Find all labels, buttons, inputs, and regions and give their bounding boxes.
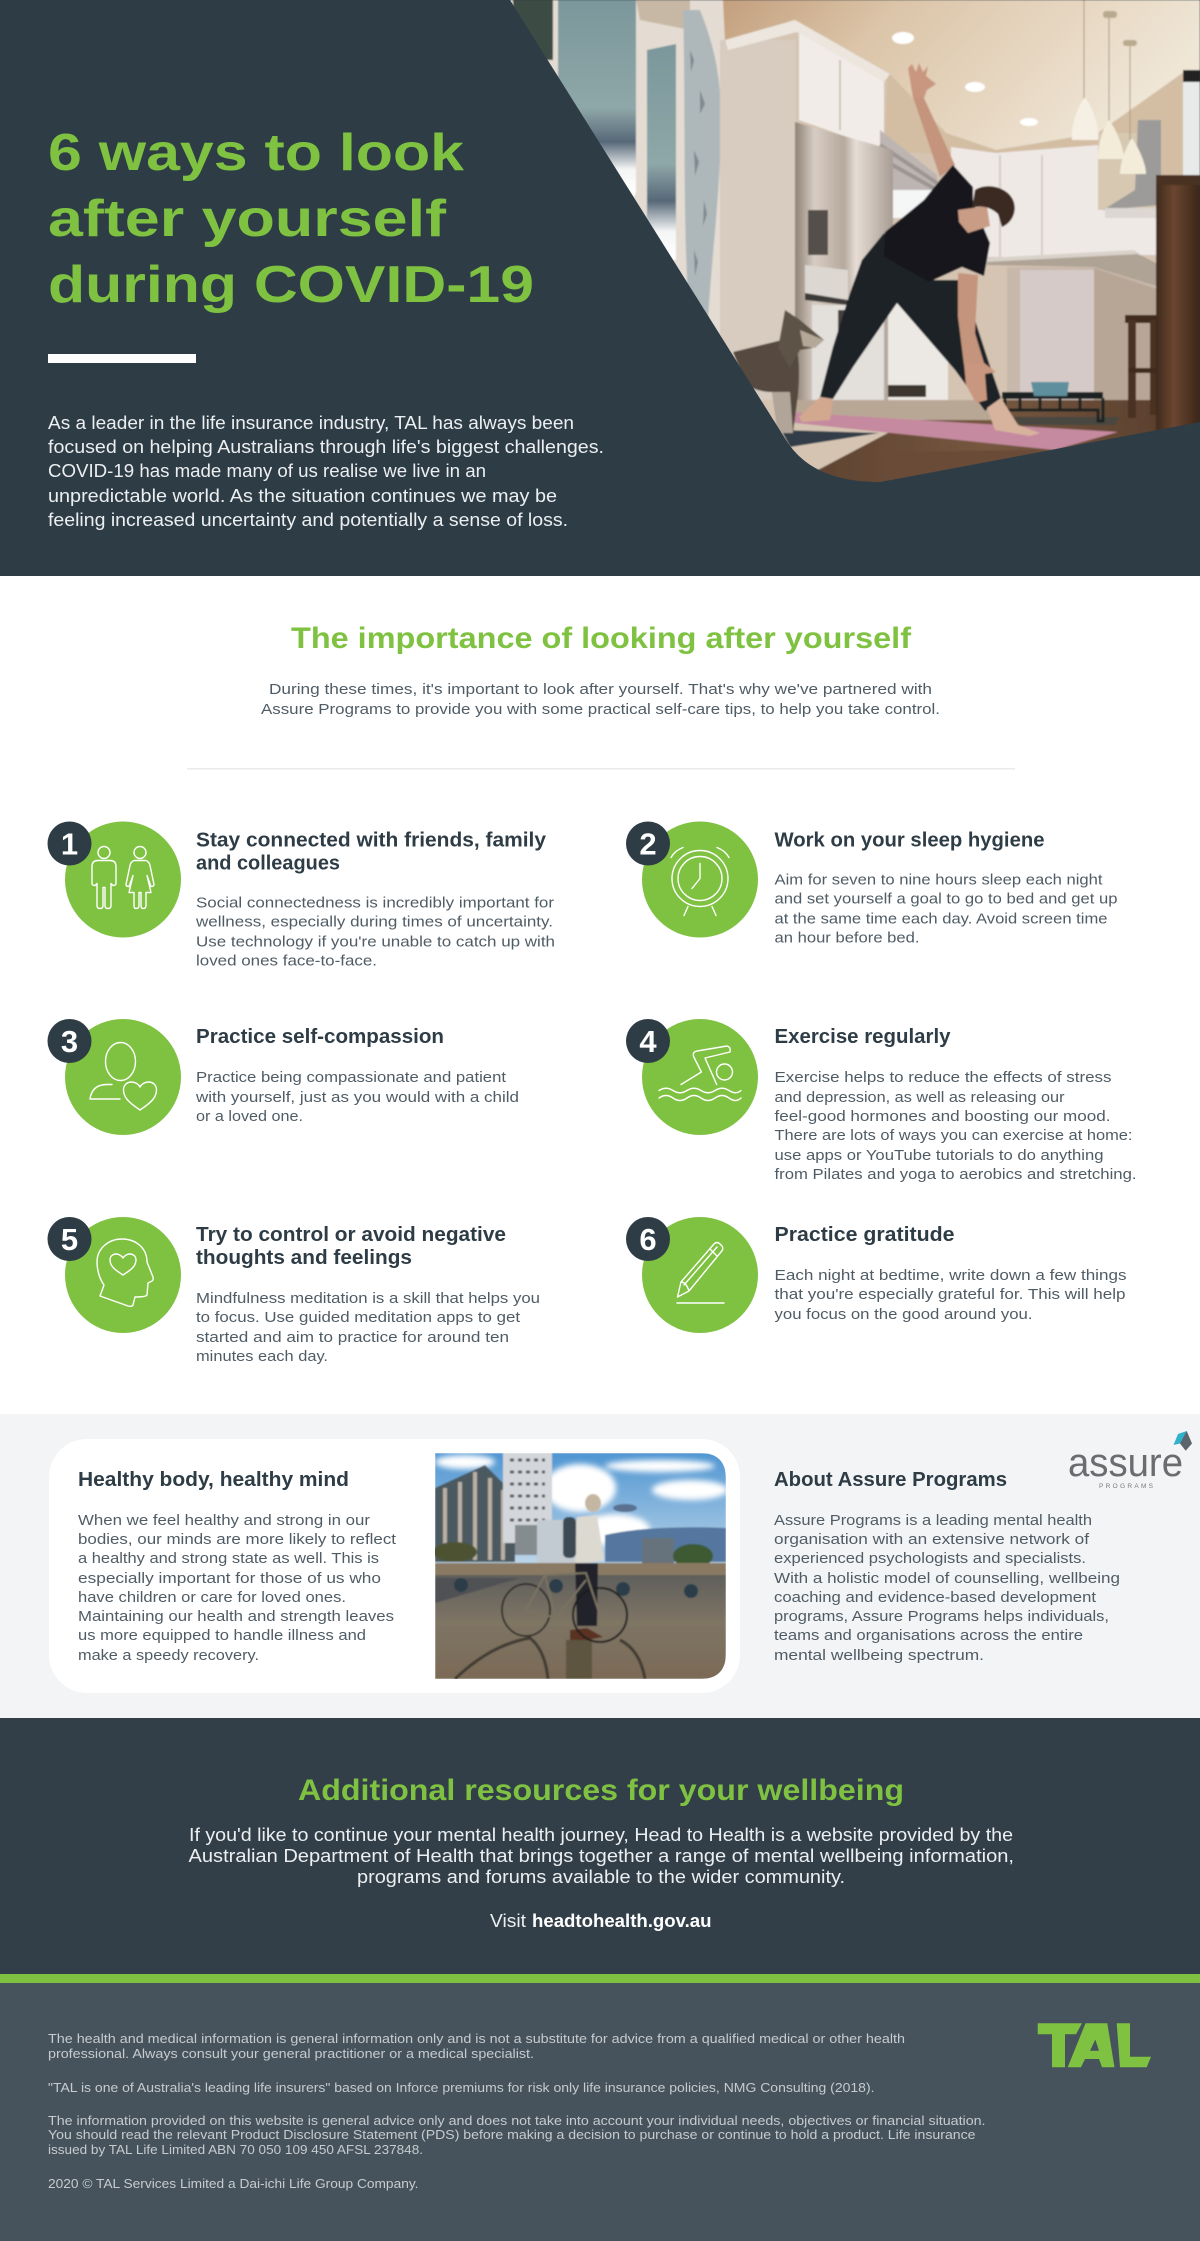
tip 2 body: and set yourself a goal to go to bed and get up — [774, 890, 1118, 908]
tip 6: practice gratitude — [626, 1217, 1126, 1333]
about Assure Programs body: coaching and evidence-based development — [774, 1589, 1097, 1606]
about Assure Programs body — [774, 1512, 1120, 1664]
tip 3 body — [195, 1069, 519, 1125]
card body text: a healthy and strong state as well. This is — [78, 1550, 379, 1567]
tip 4 body: use apps or YouTube tutorials to do anything — [774, 1147, 1104, 1164]
tip 5 body — [196, 1290, 540, 1365]
tip 3: self-compassion — [48, 1019, 519, 1135]
tip 1: stay connected — [48, 822, 555, 970]
green divider bar — [0, 1974, 1200, 1983]
tip 5 body: minutes each day. — [196, 1348, 328, 1365]
card body text: us more equipped to handle illness and — [78, 1627, 366, 1644]
intro text — [48, 413, 604, 530]
resources text: programs and forums available to the wider community. — [357, 1867, 845, 1887]
intro text: COVID-19 has made many of us realise we live in an — [48, 461, 486, 481]
about Assure Programs body: mental wellbeing spectrum. — [774, 1647, 984, 1664]
about Assure Programs body: With a holistic model of counselling, wellbeing — [774, 1570, 1120, 1587]
tip 4 body: There are lots of ways you can exercise at home: — [774, 1127, 1132, 1144]
card heading: Healthy body, healthy mind — [78, 1469, 349, 1491]
tip 2 body — [774, 872, 1118, 946]
tip 6 body — [774, 1267, 1126, 1323]
card body text: have children or care for loved ones. — [78, 1589, 346, 1606]
intro text: unpredictable world. As the situation continues we may be — [48, 486, 557, 506]
tip 5 heading: Try to control or avoid negative — [196, 1224, 506, 1246]
tip 1 body: Social connectedness is incredibly important for — [196, 894, 554, 912]
about Assure Programs body: teams and organisations across the entire — [774, 1627, 1083, 1644]
tip 4 body: Exercise helps to reduce the effects of stress — [774, 1069, 1112, 1086]
photo: woman stretching in a kitchen with a dog — [500, 0, 1200, 490]
number badge 3: 3 — [61, 1024, 78, 1059]
tip 5 heading — [196, 1224, 506, 1269]
footer disclaimer text: professional. Always consult your general practitioner or a medical specialist. — [48, 2047, 534, 2061]
tip 4 body: and depression, as well as releasing our — [774, 1089, 1065, 1106]
photo: cyclist with bike in city plaza — [433, 1453, 728, 1679]
number badge 4 — [626, 1019, 670, 1063]
tip 5 body: Mindfulness meditation is a skill that helps you — [196, 1290, 540, 1307]
tip 3 body: or a loved one. — [196, 1108, 303, 1125]
tip 1 heading: and colleagues — [196, 852, 340, 874]
footer disclaimer text: The information provided on this website is general advice only and does not take into account your individual needs, objectives or financial situation. — [48, 2114, 986, 2128]
number badge 5: 5 — [61, 1222, 78, 1257]
icon: swimmer — [642, 1019, 758, 1135]
tip 5 body: to focus. Use guided meditation apps to get — [196, 1309, 521, 1326]
card: healthy body, healthy mind — [49, 1439, 740, 1693]
tip 5: control negative thoughts — [48, 1217, 540, 1365]
tip 6 body: Each night at bedtime, write down a few things — [774, 1267, 1126, 1284]
logo: assure programs: PROGRAMS — [1099, 1483, 1154, 1490]
icon: man and woman — [65, 822, 181, 938]
resources text: Australian Department of Health that brings together a range of mental wellbeing information, — [188, 1846, 1014, 1866]
tip 1 body — [195, 894, 555, 970]
tip 4 body: feel-good hormones and boosting our mood. — [774, 1108, 1110, 1125]
card body text — [78, 1512, 397, 1664]
tip 4: exercise regularly — [626, 1019, 1136, 1183]
number badge 2 — [626, 822, 670, 866]
card body text: make a speedy recovery. — [78, 1647, 259, 1664]
tip 6 body: you focus on the good around you. — [774, 1306, 1032, 1323]
tip 3 body: Practice being compassionate and patient — [196, 1069, 507, 1086]
logo: assure programs: assure — [1068, 1441, 1183, 1485]
intro text: feeling increased uncertainty and potentially a sense of loss. — [48, 510, 568, 530]
tip 5 heading: thoughts and feelings — [196, 1247, 412, 1269]
section intro text: During these times, it's important to look after yourself. That's why we've partnered with — [269, 681, 932, 698]
tip 2 heading: Work on your sleep hygiene — [774, 830, 1044, 852]
tip 3 body: with yourself, just as you would with a child — [195, 1089, 519, 1106]
tip 1 body: wellness, especially during times of uncertainty. — [195, 914, 553, 930]
about Assure Programs body: Assure Programs is a leading mental health — [774, 1512, 1092, 1529]
section intro text — [261, 681, 940, 718]
panel: hero background — [0, 0, 1200, 576]
tip 4 body: from Pilates and yoga to aerobics and stretching. — [774, 1166, 1136, 1183]
section intro text: Assure Programs to provide you with some practical self-care tips, to help you take control. — [261, 701, 940, 718]
icon: head with heart — [65, 1217, 181, 1333]
card body text: bodies, our minds are more likely to reflect — [78, 1531, 397, 1548]
card body text: When we feel healthy and strong in our — [78, 1512, 370, 1529]
number badge 3 — [48, 1019, 92, 1063]
panel: white tips section — [0, 576, 1200, 1414]
tip 6 body: that you're especially grateful for. This will help — [774, 1286, 1126, 1303]
number badge 6: 6 — [639, 1222, 657, 1257]
footer disclaimer text: You should read the relevant Product Disclosure Statement (PDS) before making a decision to purchase or continue to hold a product. Life insurance — [48, 2128, 976, 2142]
heading: importance of looking after yourself: The importance of looking after yourself — [291, 622, 912, 655]
about Assure Programs body: experienced psychologists and specialists. — [774, 1550, 1086, 1567]
title underline bar — [48, 354, 196, 363]
title: during COVID-19 — [48, 256, 534, 314]
title: after yourself — [48, 190, 447, 248]
number badge 4: 4 — [639, 1024, 657, 1059]
icon: alarm clock — [642, 822, 758, 938]
number badge 6 — [626, 1217, 670, 1261]
footer disclaimer text: issued by TAL Life Limited ABN 70 050 109 450 AFSL 237848. — [48, 2143, 423, 2157]
visit link: headtohealth.gov.au — [532, 1911, 712, 1931]
footer disclaimer text: The health and medical information is general information only and is not a substitute for advice from a qualified medical or other health — [48, 2032, 905, 2046]
tip 2 body: Aim for seven to nine hours sleep each night — [774, 872, 1103, 888]
tip 6 heading: Practice gratitude — [774, 1224, 954, 1246]
intro text: As a leader in the life insurance industry, TAL has always been — [48, 413, 574, 433]
panel: additional resources — [0, 1718, 1200, 1974]
about Assure Programs heading: About Assure Programs — [774, 1469, 1007, 1491]
logo: TAL — [1038, 2023, 1151, 2067]
tip 2: sleep hygiene — [626, 822, 1118, 946]
about Assure Programs body: programs, Assure Programs helps individuals, — [774, 1608, 1109, 1625]
tip 1 heading — [196, 830, 547, 874]
icon: pencil — [642, 1217, 758, 1333]
footer disclaimer text — [48, 2032, 986, 2191]
number badge 1 — [48, 822, 92, 866]
footer disclaimer text: 2020 © TAL Services Limited a Dai-ichi Life Group Company. — [48, 2177, 418, 2191]
heading: additional resources: Additional resources for your wellbeing — [298, 1774, 904, 1807]
visit link: Visit — [490, 1911, 526, 1931]
footer disclaimer text: "TAL is one of Australia's leading life insurers" based on Inforce premiums for risk only life insurance policies, NMG Consulting (2018). — [48, 2081, 874, 2095]
panel: grey band — [0, 1414, 1200, 1718]
tip 1 body: loved ones face-to-face. — [196, 952, 377, 970]
title — [48, 124, 534, 314]
tip 1 body: Use technology if you're unable to catch up with — [196, 934, 555, 950]
icon: person with heart — [65, 1019, 181, 1135]
tip 2 body: an hour before bed. — [774, 930, 920, 946]
resources text: If you'd like to continue your mental health journey, Head to Health is a website provided by the — [189, 1825, 1013, 1845]
card body text: especially important for those of us who — [78, 1570, 381, 1587]
number badge 5 — [48, 1217, 92, 1261]
tip 4 heading: Exercise regularly — [774, 1026, 951, 1048]
intro text: focused on helping Australians through life's biggest challenges. — [48, 437, 604, 457]
tip 5 body: started and aim to practice for around ten — [196, 1329, 509, 1346]
number badge 2: 2 — [639, 826, 657, 862]
tip 1 heading: Stay connected with friends, family — [196, 830, 547, 852]
tip 3 heading: Practice self-compassion — [196, 1026, 444, 1048]
panel: footer — [0, 1983, 1200, 2241]
title: 6 ways to look — [48, 124, 464, 182]
card body text: Maintaining our health and strength leaves — [78, 1608, 394, 1625]
resources text — [188, 1825, 1014, 1887]
number badge 1: 1 — [61, 826, 78, 862]
about Assure Programs body: organisation with an extensive network of — [774, 1531, 1090, 1548]
tip 2 body: at the same time each day. Avoid screen time — [774, 910, 1108, 928]
tip 4 body — [774, 1069, 1136, 1183]
